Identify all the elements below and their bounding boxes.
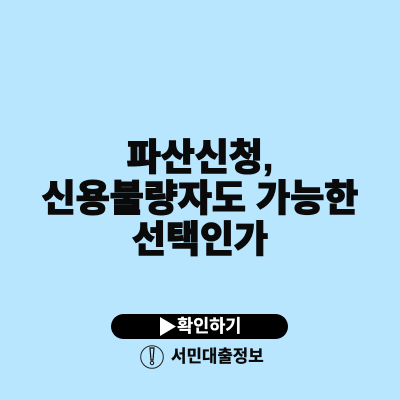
button: confirm	[111, 314, 288, 339]
title: 선택인가	[132, 219, 268, 260]
title: 신용불량자도 가능한	[42, 178, 358, 219]
title	[42, 137, 358, 260]
icon: exclamation circle	[140, 345, 164, 369]
brand name: 서민대출정보	[171, 347, 264, 366]
button label: 확인하기	[177, 316, 241, 336]
brand row	[140, 345, 264, 369]
title: 파산신청,	[127, 137, 273, 178]
icon: play arrow	[160, 317, 176, 336]
